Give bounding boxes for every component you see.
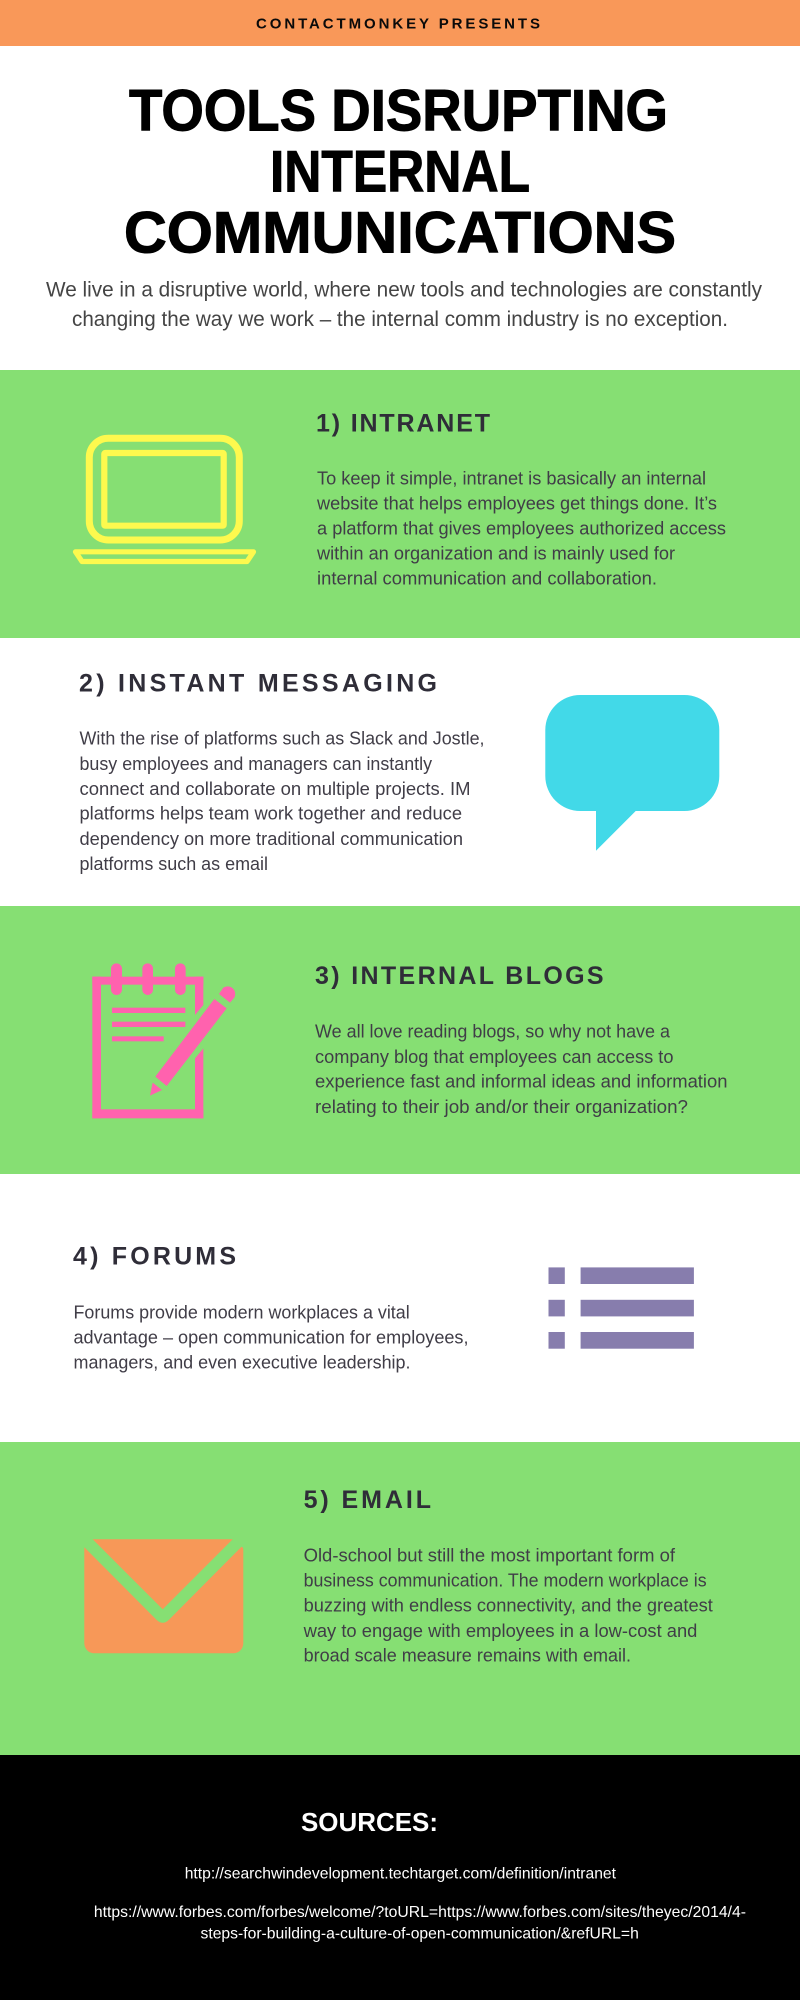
body: internal blogs: relating to their job and/or their organization? <box>315 1097 688 1117</box>
intro text: We live in a disruptive world, where new tools and technologies are constantly <box>46 279 762 302</box>
heading: sources: SOURCES: <box>301 1807 438 1837</box>
panel: sources <box>0 1755 800 2000</box>
title: TOOLS DISRUPTING <box>129 78 668 143</box>
header banner <box>0 0 800 46</box>
body: intranet: a platform that gives employees authorized access <box>317 519 726 539</box>
body: instant messaging: connect and collaborate on multiple projects. IM <box>80 779 471 799</box>
panel: intranet <box>0 370 800 638</box>
heading: internal blogs: 3) INTERNAL BLOGS <box>315 962 604 990</box>
panel: email <box>0 1442 800 1755</box>
icon: speech bubble <box>545 695 719 851</box>
body: email: way to engage with employees in a low-cost and <box>303 1621 697 1641</box>
body: instant messaging: With the rise of platforms such as Slack and Jostle, <box>80 729 484 749</box>
body: email: business communication. The modern workplace is <box>304 1570 707 1590</box>
icon: laptop <box>76 438 254 562</box>
body: intranet: within an organization and is mainly used for <box>316 544 675 564</box>
body: email: Old-school but still the most important form of <box>304 1545 676 1565</box>
body: intranet <box>316 469 726 588</box>
body: instant messaging: dependency on more traditional communication <box>80 829 463 849</box>
body: forums: advantage – open communication for employees, <box>74 1328 468 1348</box>
body: forums <box>74 1302 468 1372</box>
header banner: CONTACTMONKEY PRESENTS <box>256 15 540 32</box>
source link: forbes: https://www.forbes.com/forbes/welcome/?toURL=https://www.forbes.com/sites/theyec/2014/4- <box>94 1904 746 1921</box>
icon: notepad and pencil <box>92 963 235 1118</box>
title: INTERNAL <box>270 139 530 204</box>
heading: forums: 4) FORUMS <box>73 1242 236 1270</box>
body: instant messaging <box>80 729 484 874</box>
body: internal blogs: experience fast and informal ideas and information <box>315 1072 728 1092</box>
body: internal blogs: company blog that employees can access to <box>315 1047 674 1067</box>
source link: intranet definition: http://searchwindevelopment.techtarget.com/definition/intranet <box>185 1866 617 1883</box>
body: email: broad scale measure remains with email. <box>304 1645 631 1665</box>
body: instant messaging: platforms helps team work together and reduce <box>80 804 462 824</box>
heading: email: 5) EMAIL <box>304 1486 431 1514</box>
panel: forums <box>73 1242 694 1372</box>
heading: intranet: 1) INTRANET <box>316 409 490 437</box>
source link: forbes <box>94 1904 746 1943</box>
body: intranet: To keep it simple, intranet is basically an internal <box>317 469 706 489</box>
body: instant messaging: platforms such as email <box>80 854 268 874</box>
source link: forbes: steps-for-building-a-culture-of-open-communication/&refURL=h <box>200 1926 639 1943</box>
body: intranet: internal communication and collaboration. <box>317 568 657 588</box>
title: COMMUNICATIONS <box>124 200 676 265</box>
intro text <box>46 279 762 331</box>
body: internal blogs <box>315 1022 728 1117</box>
panel: internal blogs <box>0 906 800 1174</box>
body: instant messaging: busy employees and managers can instantly <box>80 754 432 774</box>
body: intranet: website that helps employees get things done. It’s <box>316 494 717 514</box>
body: email <box>303 1545 713 1665</box>
body: internal blogs: We all love reading blogs, so why not have a <box>315 1022 671 1042</box>
title <box>124 78 676 265</box>
body: email: buzzing with endless connectivity, and the greatest <box>304 1595 713 1615</box>
panel: instant messaging <box>79 669 719 874</box>
body: forums: Forums provide modern workplaces a vital <box>74 1302 410 1322</box>
intro text: changing the way we work – the internal comm industry is no exception. <box>72 308 728 331</box>
icon: list <box>548 1267 694 1349</box>
heading: instant messaging: 2) INSTANT MESSAGING <box>79 669 437 697</box>
icon: envelope <box>84 1539 243 1653</box>
body: forums: managers, and even executive leadership. <box>74 1352 410 1372</box>
